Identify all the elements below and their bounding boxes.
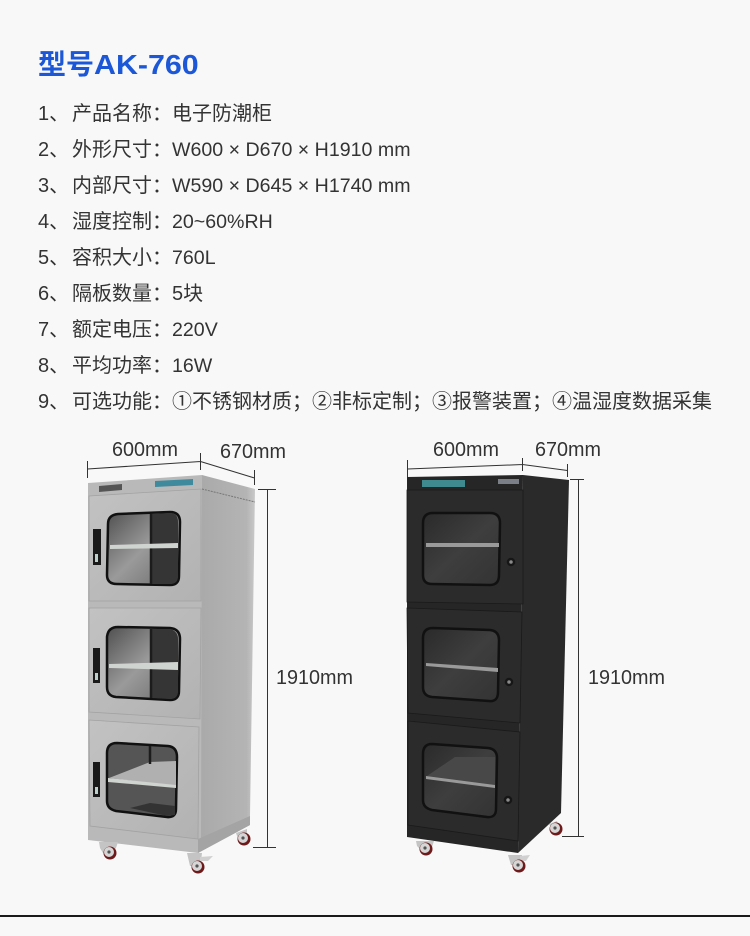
display panel bbox=[422, 480, 465, 487]
spec 8: power: 平均功率： bbox=[72, 355, 172, 377]
shelves bbox=[426, 543, 499, 788]
spec 1: product name: 产品名称： bbox=[72, 103, 172, 125]
spec 8: power bbox=[38, 355, 212, 377]
spec 6: shelves bbox=[38, 283, 203, 305]
label: gray depth: 670mm bbox=[220, 441, 286, 463]
spec 2: outer size: 2、 bbox=[38, 139, 69, 161]
gray cabinet side bbox=[198, 475, 255, 853]
door 3 bbox=[89, 720, 199, 839]
spec 3: inner size bbox=[38, 175, 411, 197]
window 1 dark half bbox=[152, 513, 178, 584]
window 1 bbox=[423, 513, 500, 585]
latches bbox=[95, 554, 98, 794]
window 1 bbox=[107, 512, 180, 585]
black cabinet bbox=[407, 475, 569, 872]
gray cabinet bbox=[88, 475, 255, 874]
spec 2: outer size bbox=[38, 139, 411, 161]
gray side seam bbox=[202, 489, 255, 502]
door 3 bbox=[408, 721, 520, 841]
display panel bbox=[155, 479, 193, 487]
shelves bbox=[108, 543, 178, 788]
spec 2: outer size: W600 × D670 × H1910 mm bbox=[172, 139, 411, 161]
spec 4: humidity control bbox=[38, 211, 273, 233]
label: gray height: 1910mm bbox=[276, 667, 353, 689]
brand plate bbox=[498, 479, 519, 484]
dimension lines: gray cabinet bbox=[88, 453, 276, 848]
door 2 bbox=[89, 608, 201, 719]
handles bbox=[93, 529, 101, 797]
casters bbox=[416, 821, 562, 872]
window 3 lower floor bbox=[130, 803, 175, 816]
locks bbox=[505, 559, 514, 803]
spec 2: outer size: 外形尺寸： bbox=[72, 139, 172, 161]
spec 5: capacity: 5、 bbox=[38, 247, 69, 269]
gray base bbox=[198, 816, 250, 853]
title: AK-760 bbox=[94, 49, 199, 80]
dimension lines: black cabinet bbox=[408, 458, 584, 836]
label: black width: 600mm bbox=[433, 439, 499, 461]
spec 6: shelves: 5块 bbox=[172, 283, 203, 305]
spec 4: humidity control: 4、 bbox=[38, 211, 69, 233]
label: gray width: 600mm bbox=[112, 439, 178, 461]
spec 8: power: 16W bbox=[172, 355, 212, 377]
window 3 bbox=[107, 743, 177, 817]
spec 4: humidity control: 湿度控制： bbox=[72, 211, 172, 233]
spec 9: options: 可选功能： bbox=[72, 391, 172, 413]
title: 型号 bbox=[38, 49, 94, 80]
spec 1: product name: 1、 bbox=[38, 103, 69, 125]
spec 7: voltage: 220V bbox=[172, 319, 218, 341]
spec list bbox=[38, 103, 712, 413]
bottom rule bbox=[0, 915, 750, 917]
spec 7: voltage: 7、 bbox=[38, 319, 69, 341]
window 2 bbox=[423, 628, 499, 701]
spec 6: shelves: 隔板数量： bbox=[72, 283, 172, 305]
window 2 dark half bbox=[152, 629, 178, 699]
spec 9: options: ①不锈钢材质；②非标定制；③报警装置；④温湿度数据采集 bbox=[172, 391, 712, 413]
spec 7: voltage bbox=[38, 319, 218, 341]
spec 1: product name: 电子防潮柜 bbox=[172, 103, 272, 125]
spec 5: capacity: 760L bbox=[172, 247, 216, 269]
brand plate bbox=[99, 484, 122, 492]
casters bbox=[99, 829, 250, 874]
shelf 3 plate bbox=[427, 757, 495, 785]
gray cabinet front bbox=[88, 475, 202, 853]
spec 8: power: 8、 bbox=[38, 355, 69, 377]
spec 3: inner size: W590 × D645 × H1740 mm bbox=[172, 175, 411, 197]
spec 5: capacity: 容积大小： bbox=[72, 247, 172, 269]
spec 9: options: 9、 bbox=[38, 391, 69, 413]
door 1 bbox=[407, 490, 523, 604]
shelf 3 plate bbox=[109, 761, 176, 786]
spec 5: capacity bbox=[38, 247, 216, 269]
door 1 bbox=[89, 489, 201, 601]
black cabinet side bbox=[518, 475, 569, 853]
window 3 bbox=[423, 744, 497, 817]
black cabinet front bbox=[407, 475, 523, 853]
title bbox=[38, 49, 199, 80]
spec 3: inner size: 内部尺寸： bbox=[72, 175, 172, 197]
window 2 bbox=[107, 627, 180, 700]
spec 4: humidity control: 20~60%RH bbox=[172, 211, 273, 233]
door 2 bbox=[407, 608, 522, 723]
window uprights bbox=[150, 514, 151, 764]
spec 7: voltage: 额定电压： bbox=[72, 319, 172, 341]
spec 3: inner size: 3、 bbox=[38, 175, 69, 197]
spec 6: shelves: 6、 bbox=[38, 283, 69, 305]
spec 1: product name bbox=[38, 103, 272, 125]
label: black height: 1910mm bbox=[588, 667, 665, 689]
label: black depth: 670mm bbox=[535, 439, 601, 461]
